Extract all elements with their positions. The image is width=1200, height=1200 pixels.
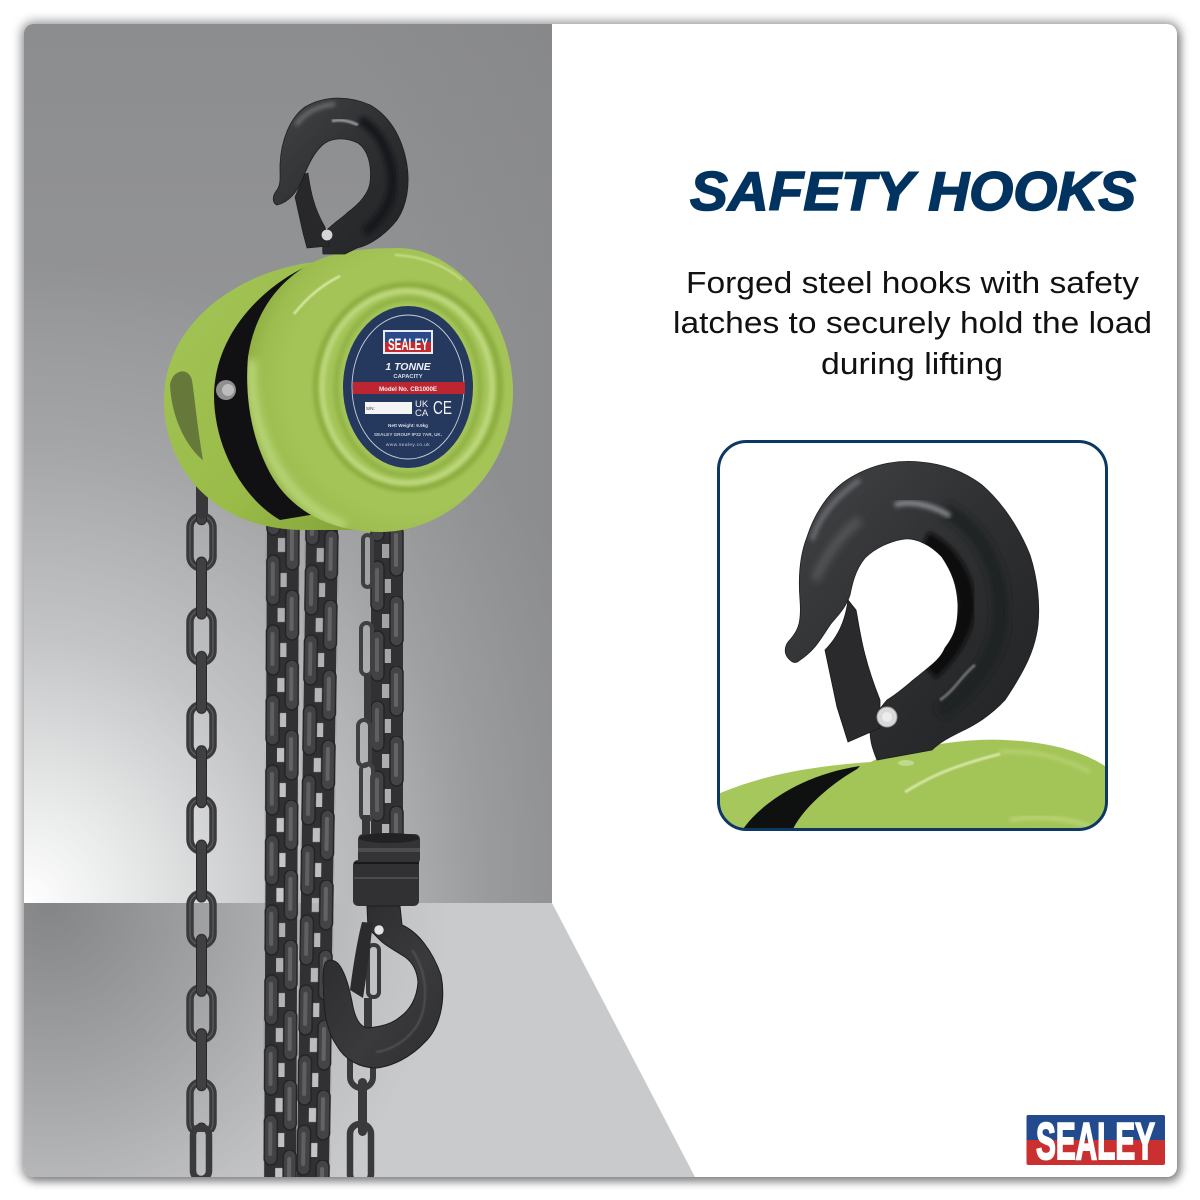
hook swivel block bbox=[353, 833, 420, 906]
description text: latches to securely hold the load bbox=[673, 305, 1152, 340]
product label: Model No. CB1000E bbox=[379, 386, 437, 393]
product label: CA bbox=[415, 408, 429, 419]
product label: www.sealey.co.uk bbox=[386, 442, 430, 448]
product label bbox=[343, 306, 473, 468]
back drum casing bbox=[164, 262, 355, 530]
product label: CAPACITY bbox=[393, 374, 423, 380]
product label: CE bbox=[433, 398, 452, 418]
front drum cover bbox=[247, 248, 513, 532]
frame bolt bbox=[216, 380, 236, 400]
product label: UK bbox=[415, 399, 429, 410]
product label: 1 TONNE bbox=[385, 361, 432, 373]
inset: hook close-up bbox=[718, 442, 1108, 835]
load chain strand one bbox=[263, 510, 300, 1177]
black centre frame bbox=[214, 267, 311, 520]
label logo bbox=[383, 330, 433, 354]
upper return chain bbox=[358, 526, 404, 840]
lower hook bbox=[323, 906, 443, 1068]
upper hook bbox=[273, 98, 408, 254]
product label: Nett Weight: 9.5kg bbox=[388, 423, 428, 428]
inset back drum bbox=[720, 762, 870, 828]
inset hook bbox=[785, 461, 1039, 760]
description text: Forged steel hooks with safety bbox=[686, 265, 1140, 300]
hoist drum bbox=[164, 248, 513, 532]
label logo: SEALEY bbox=[388, 335, 428, 354]
panel: grey studio background bbox=[24, 24, 695, 1177]
inset front drum bbox=[793, 740, 1108, 830]
side slot in casing bbox=[170, 371, 203, 460]
product label: S/N: bbox=[366, 406, 375, 411]
title: SAFETY HOOKS bbox=[690, 160, 1136, 222]
front cover highlights bbox=[252, 255, 500, 526]
description text: during lifting bbox=[821, 346, 1003, 381]
load chain strand two bbox=[296, 520, 339, 1177]
inset black frame bbox=[743, 766, 860, 829]
thin hand chain behind lower hook bbox=[350, 945, 379, 1184]
left hand chain bbox=[186, 486, 217, 1177]
product label: SEALEY GROUP IP32 7AR, UK. bbox=[374, 432, 442, 437]
description text bbox=[673, 265, 1152, 381]
